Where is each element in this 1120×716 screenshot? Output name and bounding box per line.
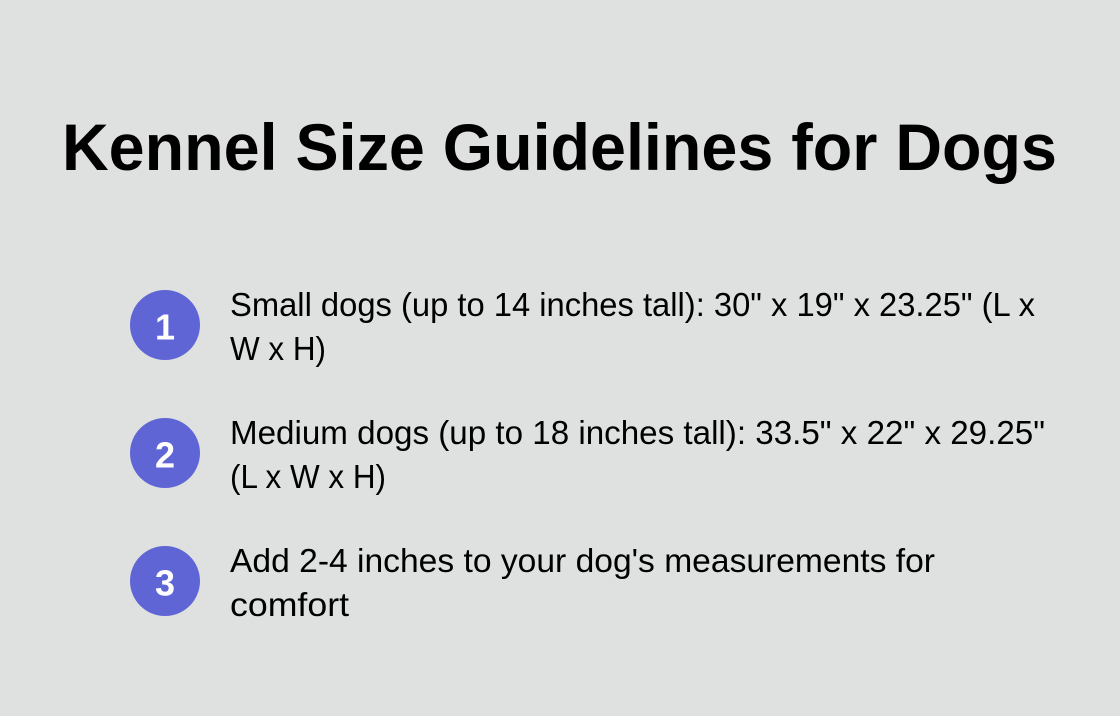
list item 2: medium dogs: [130, 414, 1045, 495]
text: medium dog dimensions: (L x W x H): [230, 458, 386, 495]
number badge 2: [130, 418, 200, 488]
number badge 1: 1: [155, 306, 175, 348]
text: medium dog dimensions: [230, 414, 1045, 495]
number badge 3: 3: [155, 562, 175, 604]
text: comfort allowance advice: comfort: [230, 586, 349, 623]
number badge 2: 2: [155, 434, 175, 476]
text: small dog dimensions: W x H): [230, 330, 326, 367]
title: Kennel Size Guidelines for Dogs: [62, 110, 1057, 184]
text: medium dog dimensions: Medium dogs (up to 18 inches tall): 33.5" x 22" x 29.25": [230, 414, 1045, 451]
text: small dog dimensions: [230, 286, 1035, 367]
list item 3: comfort allowance: [130, 542, 935, 623]
text: small dog dimensions: Small dogs (up to 14 inches tall): 30" x 19" x 23.25" (L x: [230, 286, 1035, 323]
number badge 1: [130, 290, 200, 360]
text: comfort allowance advice: [230, 542, 935, 623]
list item 1: small dogs: [130, 286, 1035, 367]
text: comfort allowance advice: Add 2-4 inches to your dog's measurements for: [230, 542, 935, 579]
number badge 3: [130, 546, 200, 616]
